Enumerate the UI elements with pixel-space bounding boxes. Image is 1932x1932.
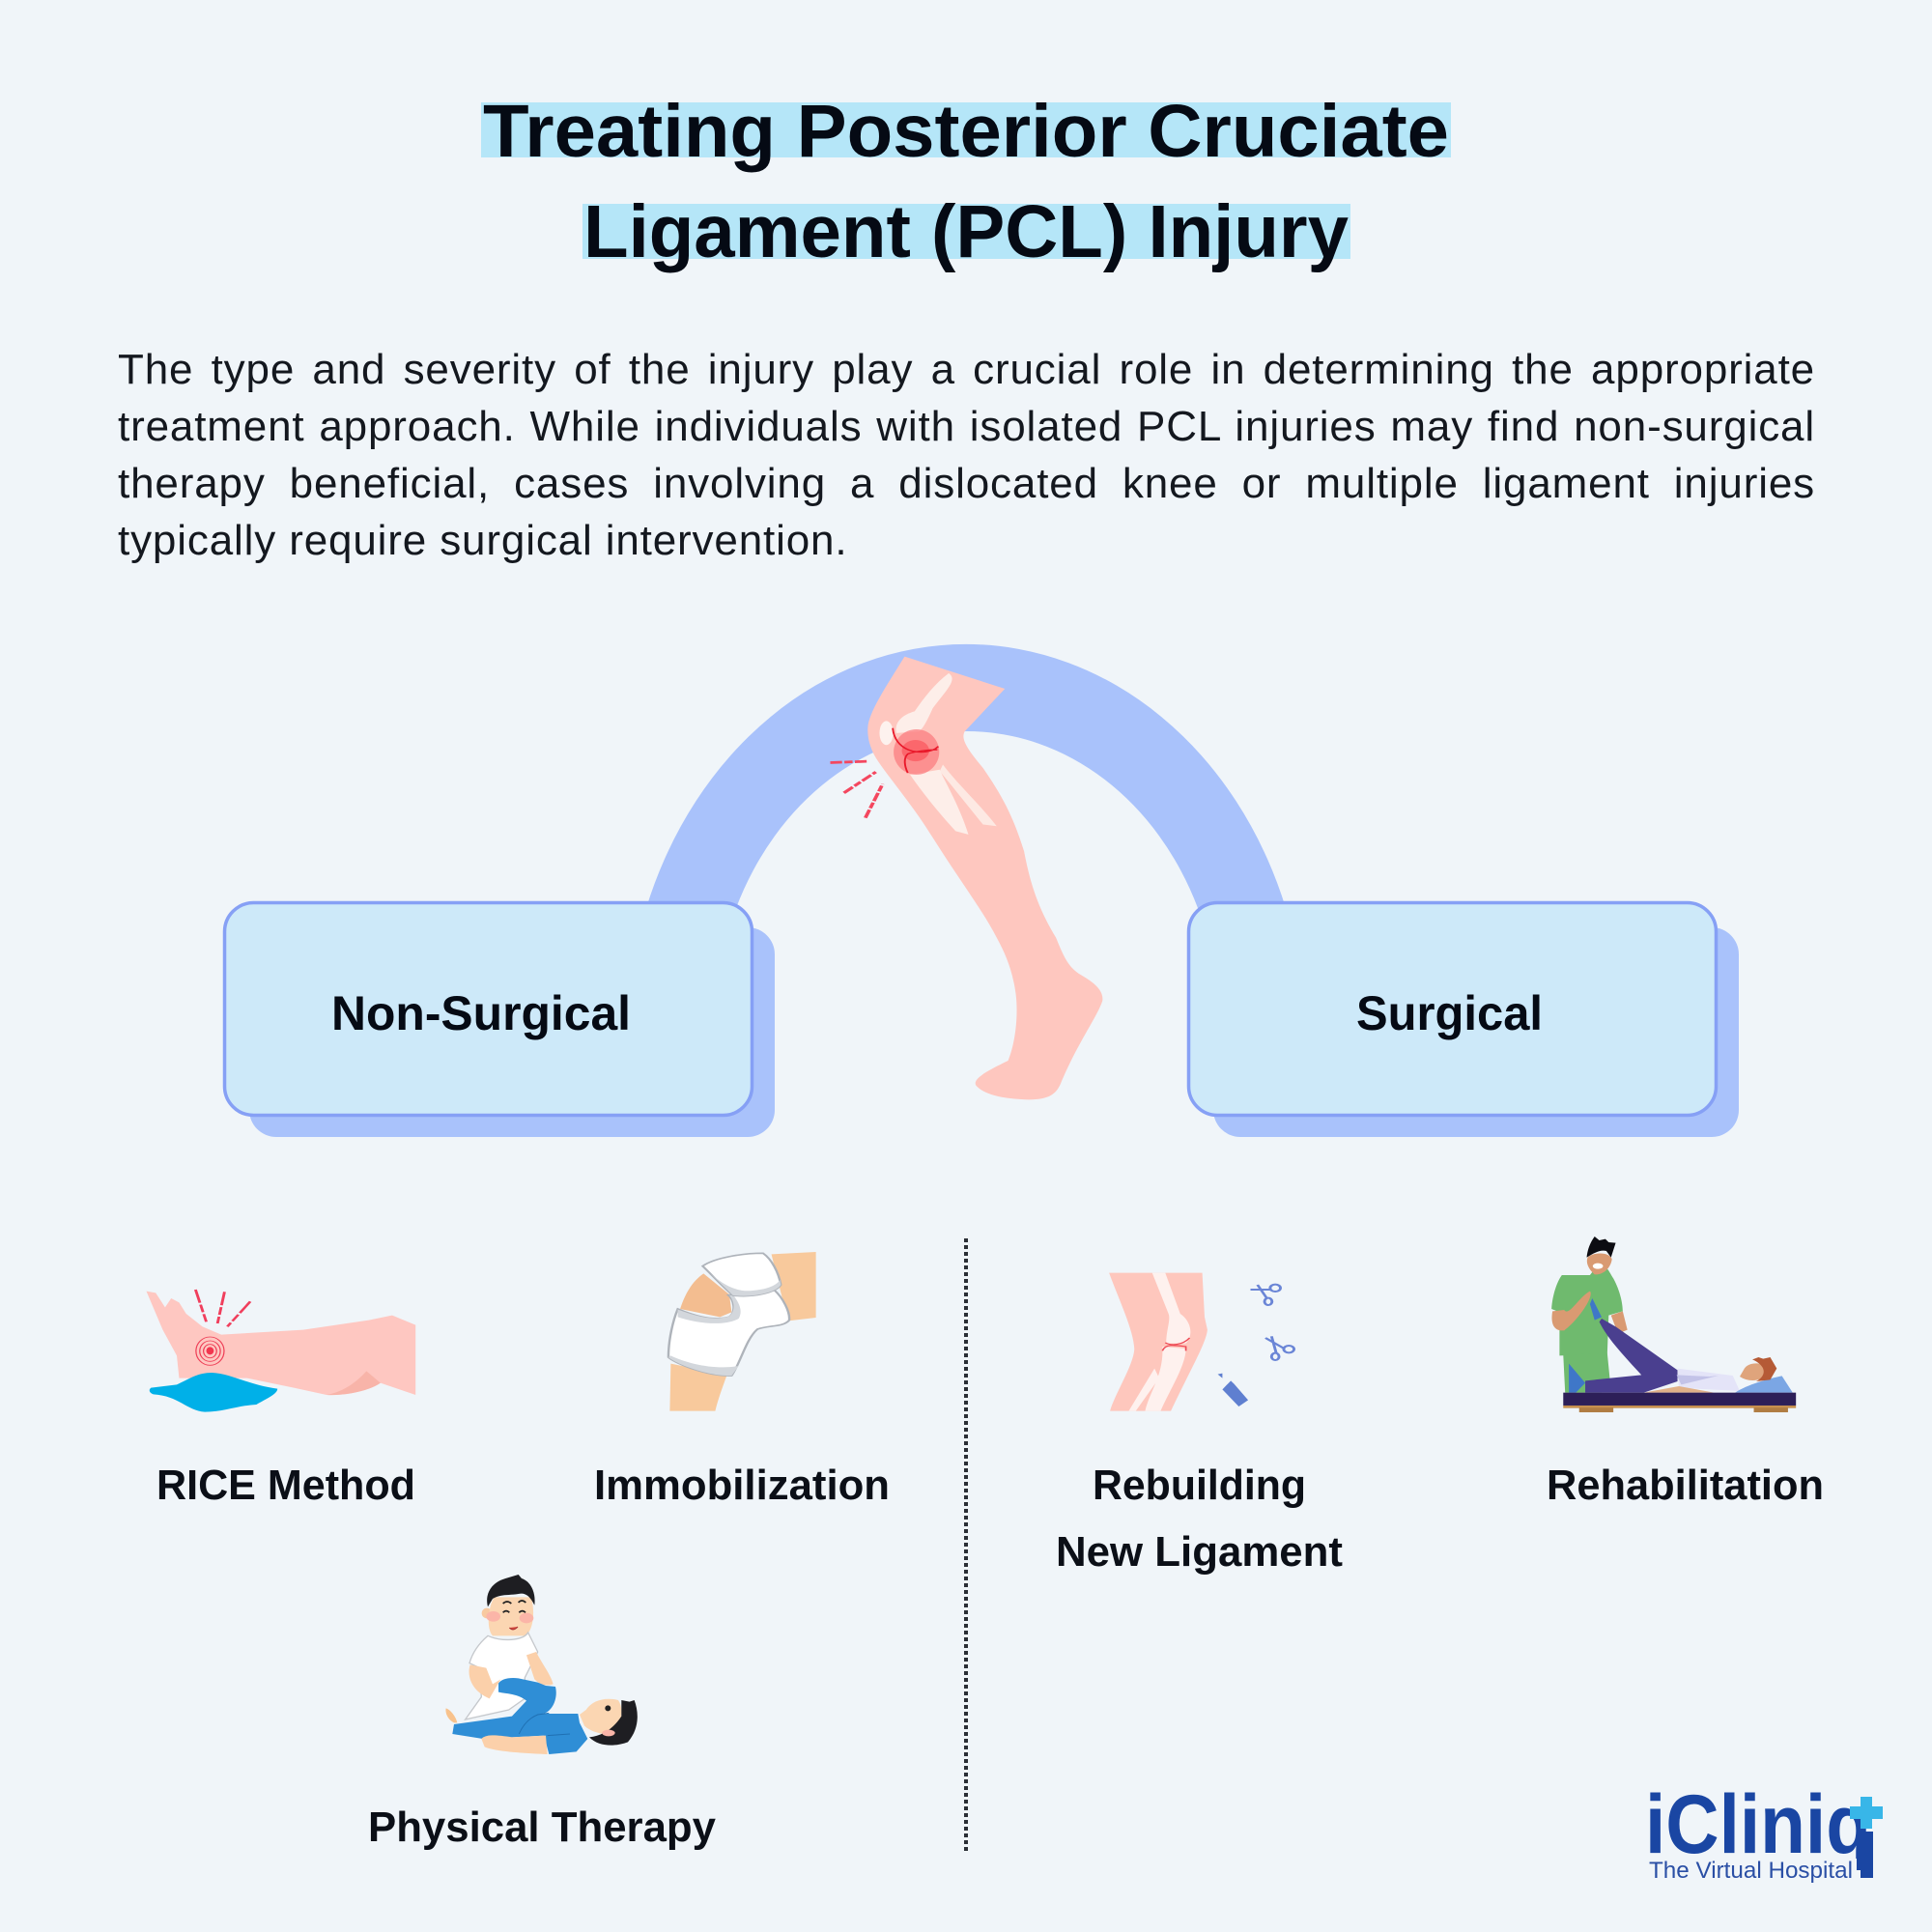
logo: iCliniq: iCliniq [1645,1778,1871,1871]
panel: surgical [1188,902,1739,1137]
title: Treating Posterior Cruciate [483,90,1449,173]
panel: non-surgical [224,902,775,1137]
intro text block: typically require surgical intervention. [118,517,847,564]
icon: foot on ice pack [147,1290,415,1412]
label: Rebuilding New Ligament: New Ligament [1056,1528,1343,1576]
panel: surgical: Surgical [1356,986,1543,1040]
label: RICE Method: RICE Method [156,1462,415,1509]
arch connecting the treatment boxes [646,644,1286,908]
label: Rebuilding New Ligament: Rebuilding [1093,1462,1306,1509]
intro text block: The type and severity of the injury play a crucial role in determining the appropriate [118,346,1815,393]
title [481,90,1451,273]
label: Rehabilitation: Rehabilitation [1547,1462,1824,1509]
panel: non-surgical: Non-Surgical [331,986,631,1040]
icon: therapist with patient on table [1551,1236,1796,1412]
icon: physical therapist and patient [445,1575,638,1754]
label: Rebuilding New Ligament [1056,1462,1343,1576]
intro text block: therapy beneficial, cases involving a dislocated knee or multiple ligament injuries [118,460,1815,507]
icon: injured leg [830,657,1102,1099]
title: Ligament (PCL) Injury [583,190,1349,273]
intro text block [118,346,1815,564]
logo: iCliniq: The Virtual Hospital [1649,1858,1853,1884]
icon: knee brace [668,1252,816,1411]
icon: knee with surgical tools [1109,1273,1294,1411]
intro text block: treatment approach. While individuals with isolated PCL injuries may find non-surgical [118,403,1815,450]
label: Immobilization: Immobilization [594,1462,890,1509]
label: Physical Therapy: Physical Therapy [368,1804,717,1851]
